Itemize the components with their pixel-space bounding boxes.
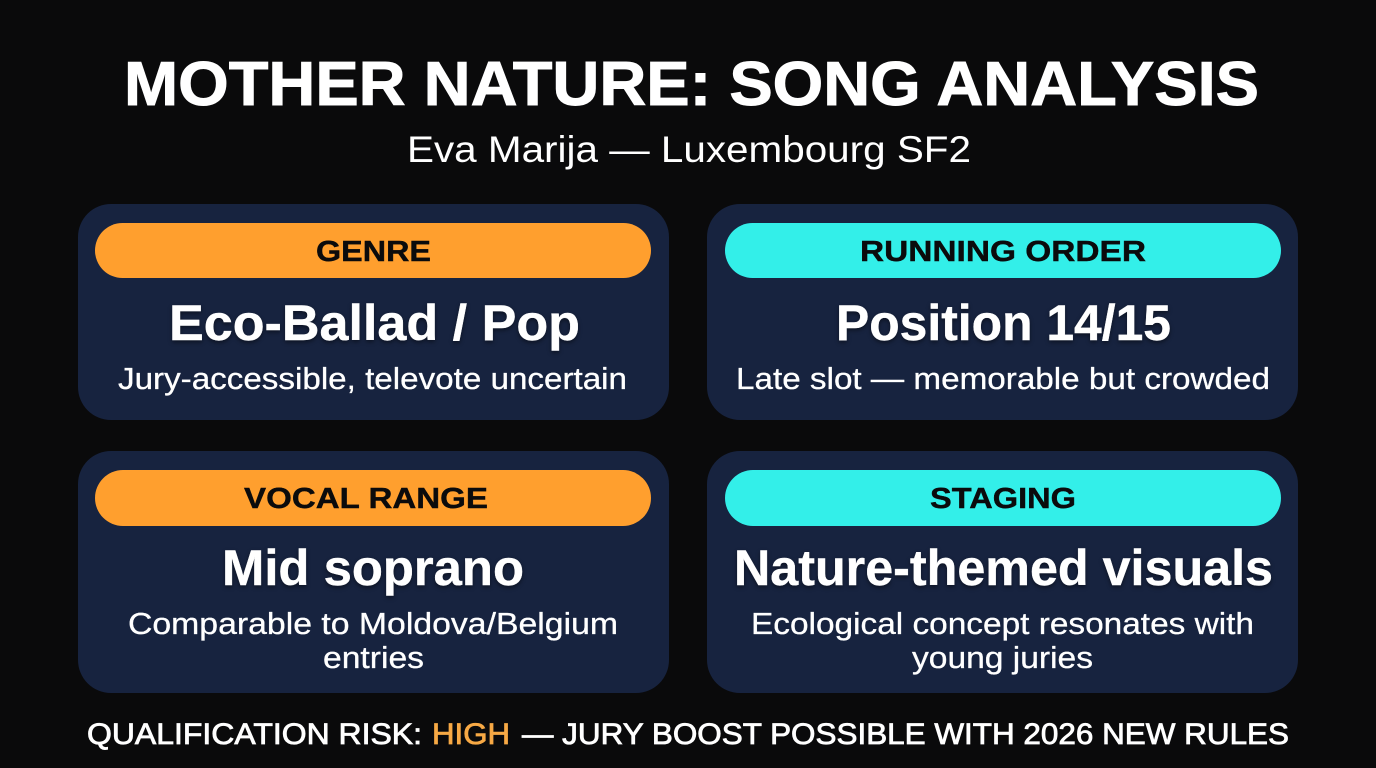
panel: vocal range (78, 451, 669, 693)
vocal range label pill: VOCAL RANGE (244, 483, 488, 515)
staging label pill (725, 470, 1281, 526)
running order value: Position 14/15 (836, 295, 1171, 351)
title: MOTHER NATURE: SONG ANALYSIS (124, 50, 1259, 119)
subtitle: Eva Marija — Luxembourg SF2 (407, 129, 971, 170)
staging note (751, 606, 1254, 675)
footer risk statement: — JURY BOOST POSSIBLE WITH 2026 NEW RULES (522, 718, 1289, 751)
running order label pill: RUNNING ORDER (860, 236, 1146, 268)
footer risk statement: HIGH (432, 718, 510, 751)
genre label pill: GENRE (316, 236, 431, 268)
staging label pill: STAGING (930, 483, 1076, 515)
running order note: Late slot — memorable but crowded (736, 361, 1270, 396)
vocal range note: Comparable to Moldova/Belgium (128, 606, 618, 641)
staging value: Nature-themed visuals (734, 540, 1273, 596)
vocal range value: Mid soprano (222, 540, 524, 596)
vocal range note: entries (323, 640, 424, 675)
panel: running order (707, 204, 1298, 420)
footer risk statement (87, 718, 1289, 751)
panel: staging (707, 451, 1298, 693)
genre value: Eco-Ballad / Pop (169, 295, 580, 351)
panel: genre (78, 204, 669, 420)
vocal range note (128, 606, 618, 675)
genre label pill (95, 223, 651, 278)
footer risk statement: QUALIFICATION RISK: (87, 718, 422, 751)
staging note: Ecological concept resonates with (751, 606, 1254, 641)
vocal range label pill (95, 470, 651, 526)
running order label pill (725, 223, 1281, 278)
genre note: Jury-accessible, televote uncertain (118, 361, 627, 396)
staging note: young juries (912, 640, 1093, 675)
